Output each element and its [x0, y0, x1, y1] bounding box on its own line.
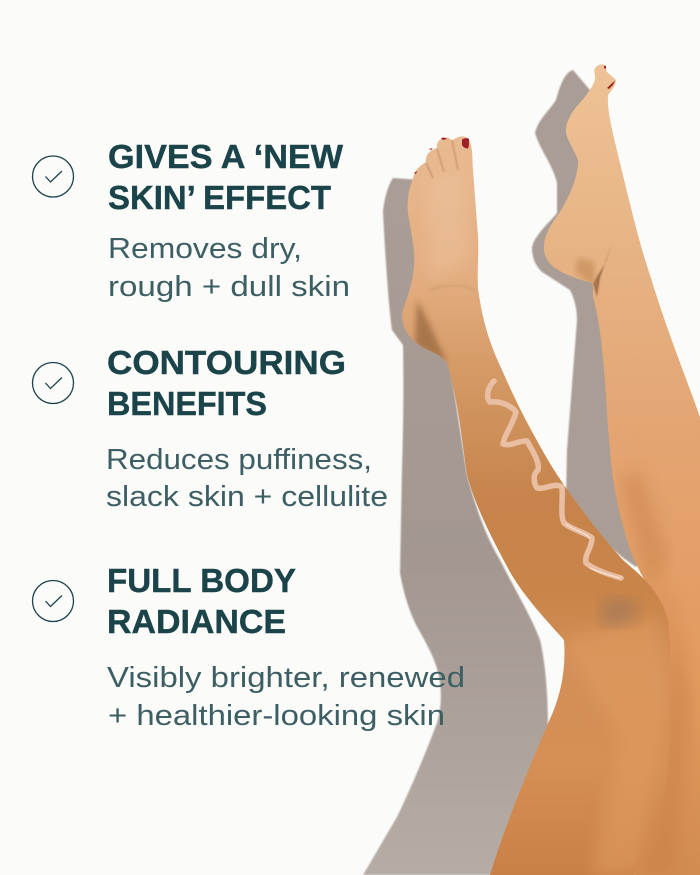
- body text: rough + dull skin: [108, 271, 350, 303]
- heading: SKIN’ EFFECT: [108, 179, 331, 216]
- gel squiggle on calf: [488, 381, 621, 578]
- wall shadow of back leg: [532, 70, 650, 567]
- heading: [107, 562, 296, 640]
- body text: Visibly brighter, renewed: [107, 662, 465, 694]
- heading: [108, 138, 344, 216]
- body text: [106, 444, 388, 513]
- icon: check circle: [32, 156, 74, 197]
- heading: GIVES A ‘NEW: [108, 138, 344, 175]
- heading: RADIANCE: [107, 603, 286, 640]
- front leg: [395, 130, 680, 875]
- body text: + healthier-looking skin: [108, 700, 445, 732]
- toe gaps: [426, 140, 458, 178]
- body text: Removes dry,: [108, 233, 302, 265]
- heading: CONTOURING: [107, 344, 346, 381]
- body text: slack skin + cellulite: [106, 481, 388, 513]
- item 3: full body radiance: [32, 562, 465, 732]
- body text: Reduces puffiness,: [106, 444, 372, 476]
- photo: legs against wall: [363, 60, 700, 875]
- heading: BENEFITS: [107, 385, 267, 422]
- item 1: new skin effect: [32, 138, 350, 303]
- back leg: [530, 60, 700, 875]
- body text: [107, 662, 465, 732]
- toenail polish: [414, 66, 615, 174]
- item 2: contouring benefits: [32, 344, 388, 513]
- heading: [107, 344, 346, 422]
- body text: [108, 233, 350, 303]
- icon: check circle: [32, 362, 74, 404]
- wall shadow of front leg: [363, 178, 548, 875]
- heading: FULL BODY: [107, 562, 296, 599]
- icon: check circle: [32, 580, 74, 622]
